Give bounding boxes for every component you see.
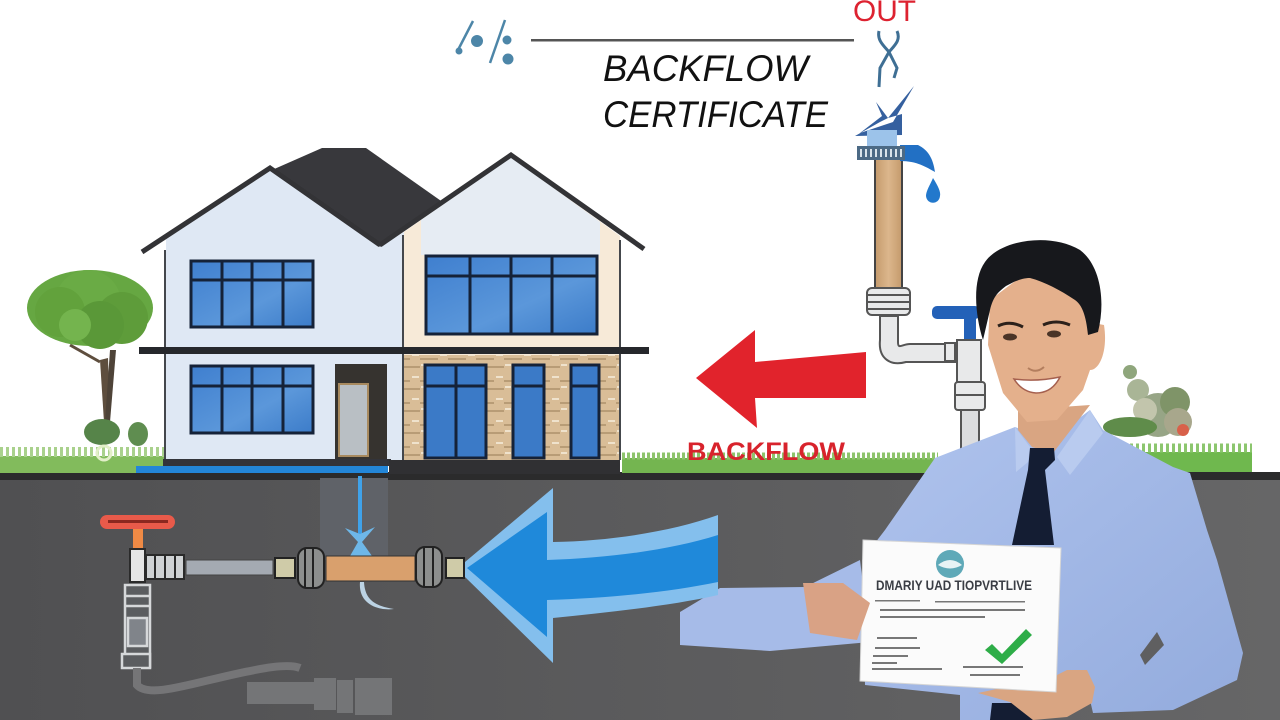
- person: extended sleeve: [680, 560, 870, 651]
- grey pipe segment: [186, 560, 273, 575]
- person: holding hand: [803, 583, 870, 640]
- person: smile: [1014, 377, 1060, 393]
- house: stone cladding: [404, 355, 620, 460]
- left pipe coupling: [275, 548, 324, 588]
- grass: [0, 446, 1252, 473]
- house: [136, 148, 649, 474]
- drain cylinder: [247, 678, 392, 715]
- house: wall edges: [165, 235, 620, 460]
- tree: [27, 270, 153, 446]
- title rule: [531, 39, 854, 42]
- window: upper right: [426, 256, 597, 334]
- person holding certificate: [862, 240, 1243, 720]
- shrub: [1103, 365, 1192, 437]
- right pipe coupling: [416, 547, 464, 587]
- certificate: logo: [936, 550, 964, 578]
- icon: blue zigzag: [855, 86, 914, 136]
- white pipe assembly: [867, 288, 985, 450]
- window: lower right double: [425, 365, 486, 458]
- lower valve: [122, 585, 150, 668]
- blue flow arrow: [465, 488, 718, 663]
- certificate: fine print: [872, 600, 1025, 676]
- title: backflow certificate: BACKFLOW: [603, 48, 811, 89]
- certificate: heading: DMARIY UAD TIOPVRTLIVE: [876, 577, 1032, 593]
- valve handle: red: [100, 515, 175, 548]
- icon: blue valve handle: [932, 306, 980, 339]
- house: right gable: [421, 157, 600, 255]
- person: tie: [990, 448, 1055, 720]
- house: left wing wall: [166, 170, 404, 460]
- underground pipe and valves: [100, 515, 464, 715]
- person: torso and sleeve: [862, 410, 1243, 720]
- person: eyes and brows: [998, 322, 1070, 340]
- certificate: [860, 540, 1061, 692]
- icon: water drop: [926, 178, 940, 203]
- window: upper left: [191, 261, 313, 327]
- red backflow arrow: [696, 330, 866, 428]
- person: head: [988, 270, 1105, 422]
- house: roof outlines: [142, 155, 644, 252]
- title: backflow certificate: CERTIFICATE: [603, 94, 829, 135]
- person: lower right hand: [978, 670, 1095, 720]
- label: backflow: BACKFLOW: [687, 438, 845, 466]
- valve body: [130, 549, 184, 582]
- vertical shaft under house: [320, 476, 394, 609]
- house: right wing wall: [404, 157, 620, 355]
- window: lower right middle: [513, 365, 544, 458]
- person: hair: [976, 240, 1101, 340]
- person: neck: [1018, 405, 1090, 453]
- copper pipe: [326, 556, 415, 581]
- underground soil band: [0, 472, 1280, 720]
- vertical supply pipe: [857, 130, 935, 288]
- person: nose: [1028, 367, 1044, 371]
- window: lower left: [191, 366, 313, 433]
- drain hose: [137, 666, 300, 690]
- house: foundation: [136, 459, 620, 474]
- house: belt course: [139, 347, 649, 354]
- person: collar: [1015, 410, 1103, 475]
- person: gap between arm and torso: [1140, 632, 1164, 665]
- title: backflow certificate: [603, 48, 829, 135]
- icon: green check: [985, 629, 1032, 664]
- house: dark centre roof: [272, 148, 444, 247]
- front door: [335, 364, 387, 460]
- icon: pliers: [879, 31, 898, 87]
- window: lower right narrow: [571, 365, 599, 458]
- icon: water symbols: [456, 20, 513, 64]
